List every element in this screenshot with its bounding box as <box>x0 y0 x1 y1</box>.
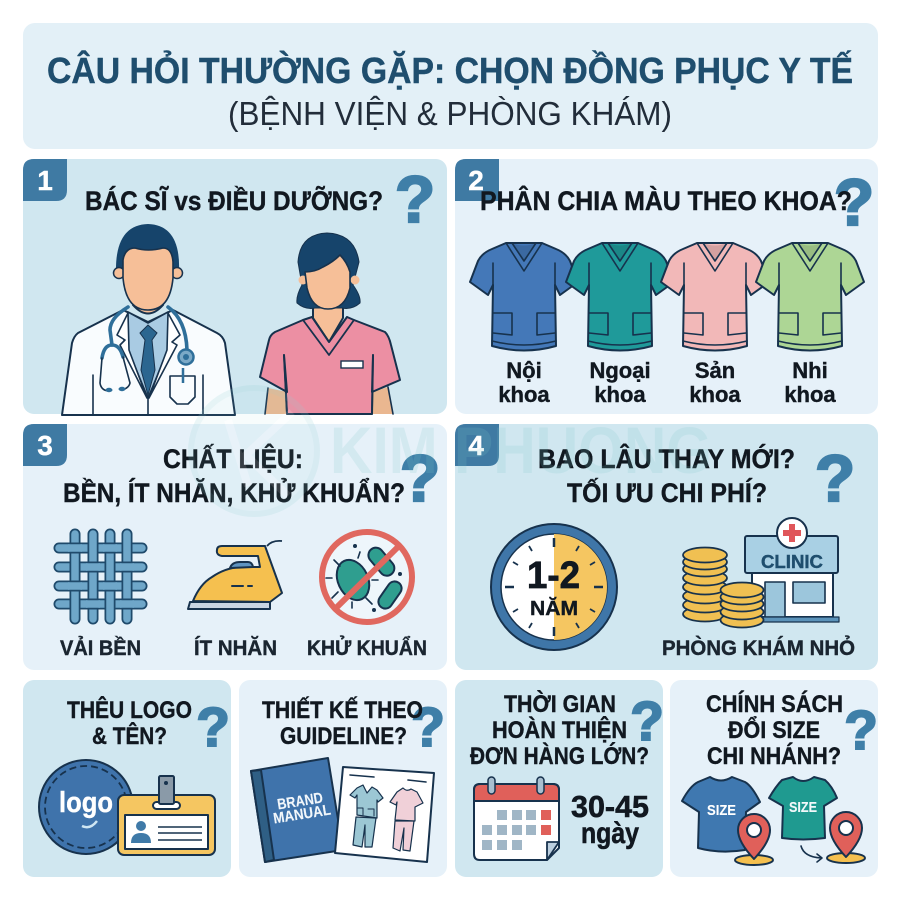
heading 8: CHÍNH SÁCH <box>706 690 843 718</box>
panel 2: colors by department <box>455 159 878 414</box>
label Sản khoa: khoa <box>689 382 741 407</box>
heading 5 line 2: & TÊN? <box>92 722 167 750</box>
question mark 2: ? <box>834 165 874 239</box>
heading 3: CHẤT LIỆU: <box>163 443 303 474</box>
badge 1: 1 <box>37 165 53 196</box>
brand manual book <box>251 758 343 862</box>
label Nội khoa: khoa <box>498 382 550 407</box>
label Nhi khoa: khoa <box>784 382 836 407</box>
location pin 1 <box>735 814 773 865</box>
heading 4: BAO LÂU THAY MỚI? <box>538 443 795 474</box>
nurse figure <box>260 233 400 414</box>
question mark 3: ? <box>400 441 440 515</box>
icon: fabric weave <box>59 534 142 619</box>
title: CÂU HỎI THƯỜNG GẶP: CHỌN ĐỒNG PHỤC Y TẾ <box>47 49 853 91</box>
label Nhi khoa: Nhi <box>792 358 828 383</box>
badge 2: 2 <box>468 165 484 196</box>
watermark logo: KIM PHUONG <box>330 413 712 487</box>
heading 7 line 2: HOÀN THIỆN <box>492 716 627 744</box>
green t-shirt: SIZE <box>789 799 817 816</box>
brand manual book: BRAND <box>276 789 324 813</box>
badge 1 <box>23 159 67 201</box>
label Sản khoa: Sản <box>695 358 735 383</box>
location pin 2 <box>827 812 865 863</box>
label: khử khuẩn: KHỬ KHUẨN <box>307 636 427 660</box>
badge 2 <box>455 159 499 201</box>
question mark 5: ? <box>196 696 230 758</box>
badge 3: 3 <box>37 430 53 461</box>
icon: iron <box>188 541 282 609</box>
panel 5: embroidered logo <box>23 680 231 877</box>
logo patch <box>39 760 133 854</box>
question mark 6: ? <box>411 696 445 758</box>
coins <box>683 548 764 628</box>
heading 3 line 2: BỀN, ÍT NHĂN, KHỬ KHUẨN? <box>63 476 405 508</box>
panel 7: production time <box>455 680 664 877</box>
uniform sheet <box>335 767 434 862</box>
panel 6: brand guideline <box>239 680 447 877</box>
question mark 8: ? <box>844 699 878 761</box>
badge 4: 4 <box>468 430 484 461</box>
brand manual book: MANUAL <box>272 802 332 827</box>
arrow between branches <box>801 846 822 862</box>
panel 1: doctor vs nurse <box>23 159 447 415</box>
heading 4 line 2: TỐI ƯU CHI PHÍ? <box>567 476 767 508</box>
label: vải bền: VẢI BỀN <box>60 637 141 660</box>
watermark logo <box>191 388 712 514</box>
scrub: Nội khoa <box>470 243 578 350</box>
heading 1: BÁC SĨ vs ĐIỀU DƯỠNG? <box>85 185 383 216</box>
duration: 30-45 days: 30-45 <box>571 789 649 824</box>
question mark 1: ? <box>395 162 435 236</box>
heading 6 line 2: GUIDELINE? <box>280 723 407 750</box>
duration: 30-45 days: ngày <box>581 817 639 850</box>
label Nội khoa: Nội <box>506 358 542 383</box>
blue t-shirt: SIZE <box>707 802 736 819</box>
header panel <box>23 23 878 149</box>
clock: 1-2 years: 1-2 <box>527 555 580 597</box>
blue t-shirt <box>682 777 760 852</box>
question mark 4: ? <box>815 441 855 515</box>
doctor figure <box>62 224 235 415</box>
green t-shirt <box>769 777 837 840</box>
heading 7 line 3: ĐƠN HÀNG LỚN? <box>470 742 649 770</box>
clinic building <box>745 518 839 622</box>
logo patch: logo <box>59 787 113 819</box>
calendar icon <box>474 777 559 860</box>
badge 3 <box>23 424 67 466</box>
scrub: Ngoại khoa <box>566 243 674 350</box>
heading 5: THÊU LOGO <box>67 696 192 724</box>
heading 2: PHÂN CHIA MÀU THEO KHOA? <box>480 185 852 216</box>
scrub: Sản khoa <box>661 243 769 350</box>
label Ngoại khoa: Ngoại <box>589 358 651 383</box>
heading 8 line 3: CHI NHÁNH? <box>707 742 841 770</box>
scrub: Nhi khoa <box>756 243 864 350</box>
icon: no bacteria <box>322 532 412 622</box>
label Ngoại khoa: khoa <box>594 382 646 407</box>
heading 8 line 2: ĐỔI SIZE <box>728 716 820 744</box>
question mark 7: ? <box>630 690 664 752</box>
heading 7: THỜI GIAN <box>504 690 616 718</box>
label: ít nhăn: ÍT NHĂN <box>194 637 277 660</box>
clock: 1-2 years <box>491 524 617 650</box>
badge 4 <box>455 424 499 466</box>
name badge <box>118 776 215 855</box>
panel 8: size exchange policy <box>670 680 878 877</box>
panel 4: replacement and cost <box>455 424 878 670</box>
panel 3: materials <box>23 424 447 670</box>
label: small clinic: PHÒNG KHÁM NHỎ <box>662 636 855 660</box>
clock: 1-2 years: NĂM <box>530 597 578 620</box>
subtitle: (BỆNH VIỆN & PHÒNG KHÁM) <box>228 95 672 132</box>
heading 6: THIẾT KẾ THEO <box>262 696 423 724</box>
duration: 30-45 days <box>571 789 649 850</box>
clinic building: CLINIC <box>761 552 823 572</box>
